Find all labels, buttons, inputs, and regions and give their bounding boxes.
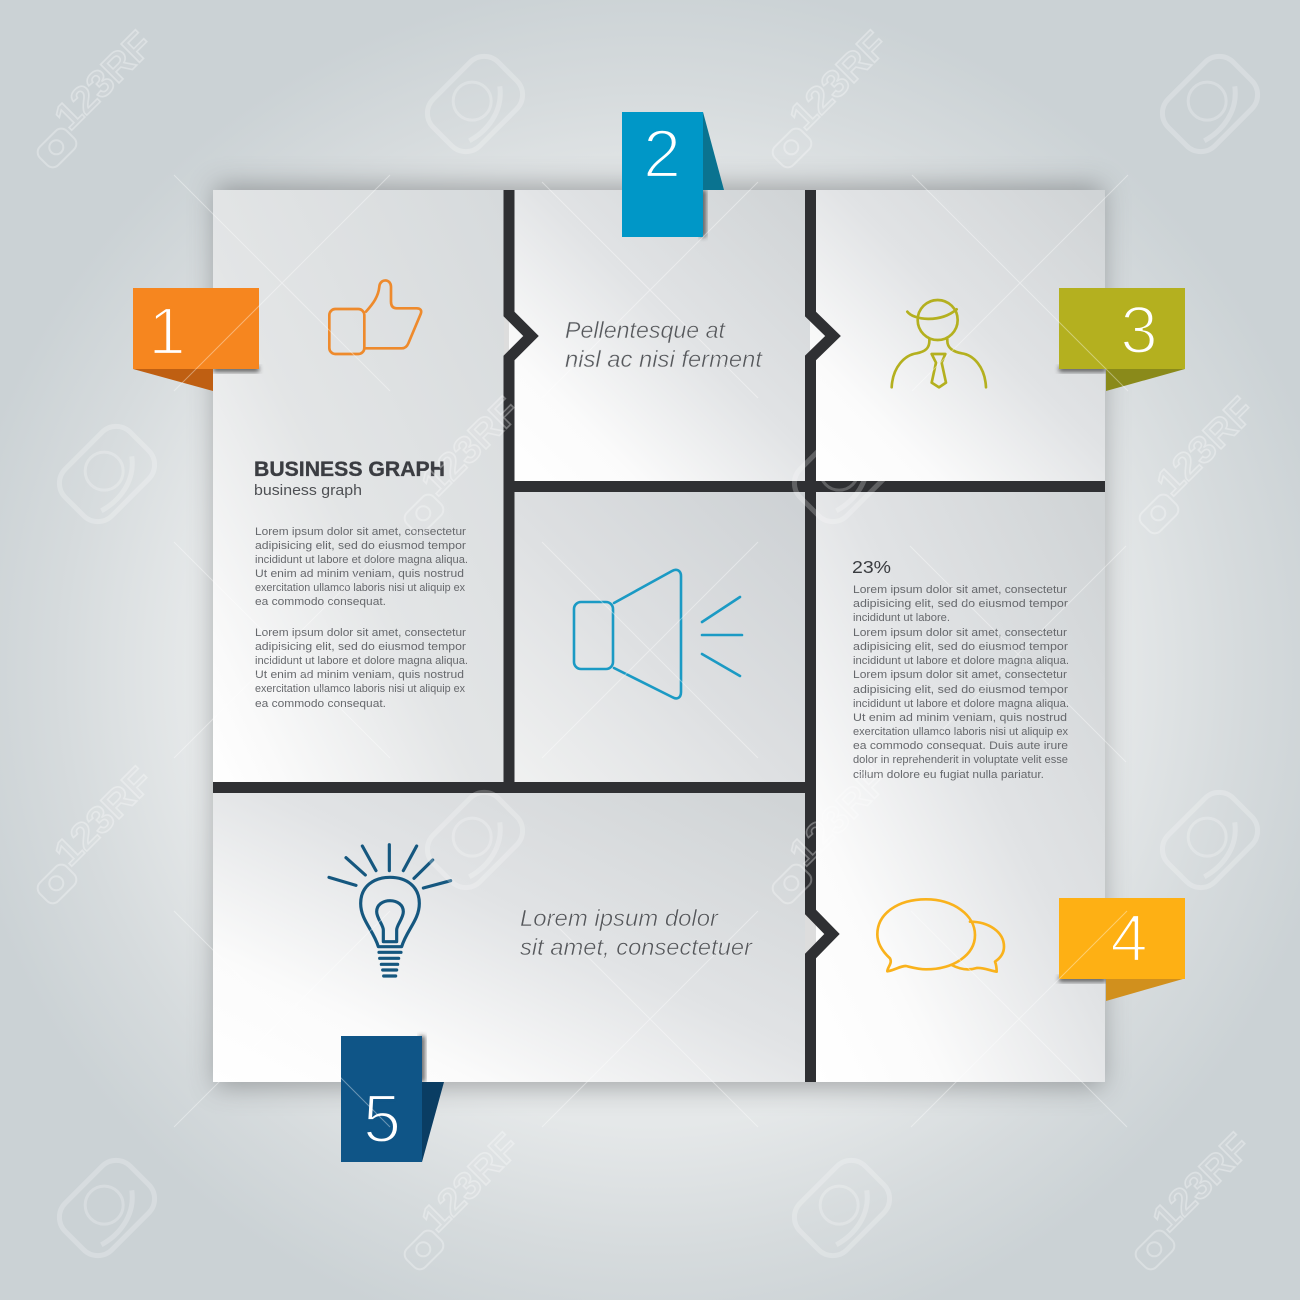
text block: left paragraphs: exercitation ullamco laboris nisi ut aliquip ex xyxy=(255,683,466,695)
ribbon 1 xyxy=(133,288,259,391)
ribbon 4 body xyxy=(1059,898,1185,979)
ribbon 4 shadow xyxy=(1059,976,1106,982)
text block: left paragraphs: Ut enim ad minim veniam, quis nostrud xyxy=(255,669,464,681)
text block: right column xyxy=(852,557,1069,781)
ribbon 1 fold xyxy=(133,369,213,391)
watermark logos: 123RF xyxy=(782,760,896,874)
ribbon 3 body xyxy=(1059,288,1185,369)
ribbon 4 fold xyxy=(1106,979,1183,1001)
right column paragraph: dolor in reprehenderit in voluptate velit esse xyxy=(853,754,1068,766)
ribbon 3 fold xyxy=(1106,369,1185,391)
ribbon 1 number: 1 xyxy=(148,294,186,369)
right column paragraph: Lorem ipsum dolor sit amet, consectetur xyxy=(853,669,1067,681)
ribbon 5 shadow xyxy=(419,1036,425,1082)
right column paragraph: incididunt ut labore. xyxy=(853,612,950,624)
right column paragraph xyxy=(853,584,1069,781)
watermark logos: 123RF xyxy=(414,390,528,504)
watermark logos: 123RF xyxy=(1145,1126,1259,1240)
ribbon 3 shadow xyxy=(1059,366,1106,372)
panel: top right cell xyxy=(810,190,1105,486)
text block: left paragraphs: Lorem ipsum dolor sit amet, consectetur xyxy=(255,627,466,639)
ribbon 5 number: 5 xyxy=(363,1081,401,1157)
ribbon 2 body xyxy=(622,112,703,237)
watermark logos: 123RF xyxy=(47,24,161,138)
right column paragraph: ea commodo consequat. Duis aute irure xyxy=(853,740,1068,752)
panel: right tall cell xyxy=(816,492,1105,1082)
right column paragraph: cillum dolore eu fugiat nulla pariatur. xyxy=(853,769,1044,781)
text block: pellentesque: Pellentesque at xyxy=(565,317,726,343)
panel: center cell xyxy=(514,492,805,782)
right column paragraph: incididunt ut labore et dolore magna aliqua. xyxy=(853,698,1069,710)
ribbon 3 xyxy=(1059,288,1185,391)
ribbon 1 shadow xyxy=(213,366,259,372)
text block: lorem ipsum italic: Lorem ipsum dolor xyxy=(520,905,719,931)
heading subtitle: business graph xyxy=(254,482,362,499)
panel: left cell xyxy=(213,190,504,783)
text block: pellentesque xyxy=(565,317,763,372)
text block: left paragraphs xyxy=(255,526,468,710)
ribbon 4 xyxy=(1059,898,1185,1001)
right column paragraph: Lorem ipsum dolor sit amet, consectetur xyxy=(853,627,1067,639)
icon: speaker xyxy=(574,570,742,698)
panel shadow xyxy=(226,196,1092,1076)
ribbon 2 shadow xyxy=(700,190,706,237)
right column paragraph: adipisicing elit, sed do eiusmod tempor xyxy=(853,598,1068,610)
text block: lorem ipsum italic: sit amet, consectetuer xyxy=(520,934,753,960)
text block: left paragraphs: adipisicing elit, sed do eiusmod tempor xyxy=(255,641,466,653)
text block: left paragraphs: exercitation ullamco laboris nisi ut aliquip ex xyxy=(255,582,466,594)
ribbon 2 number: 2 xyxy=(643,116,681,192)
ribbon 2 xyxy=(622,112,724,237)
text block: left paragraphs: incididunt ut labore et dolore magna aliqua. xyxy=(255,655,468,667)
percentage value: 23% xyxy=(852,557,891,577)
text block: left paragraphs: Ut enim ad minim veniam, quis nostrud xyxy=(255,568,464,580)
icon: thumbs up xyxy=(329,280,421,354)
text block: left paragraphs: Lorem ipsum dolor sit amet, consectetur xyxy=(255,526,466,538)
icon: chat bubbles xyxy=(877,899,1004,972)
text block: left paragraphs: ea commodo consequat. xyxy=(255,698,386,710)
text block: lorem ipsum italic xyxy=(520,905,753,960)
right column paragraph: incididunt ut labore et dolore magna aliqua. xyxy=(853,655,1069,667)
right column paragraph: adipisicing elit, sed do eiusmod tempor xyxy=(853,684,1068,696)
panel: bottom wide cell xyxy=(213,793,805,1082)
right column paragraph: Lorem ipsum dolor sit amet, consectetur xyxy=(853,584,1067,596)
text block: left paragraphs: ea commodo consequat. xyxy=(255,596,386,608)
icon: person with tie xyxy=(892,300,986,387)
ribbon 5 body xyxy=(341,1036,422,1162)
watermark logos: 123RF xyxy=(1149,390,1263,504)
watermark logos: 123RF xyxy=(47,760,161,874)
ribbon 3 number: 3 xyxy=(1120,293,1158,368)
ribbon 4 number: 4 xyxy=(1110,901,1148,976)
ribbon 5 fold xyxy=(422,1082,444,1162)
watermark logos: 123RF xyxy=(782,24,896,138)
right column paragraph: Ut enim ad minim veniam, quis nostrud xyxy=(853,712,1067,724)
right column paragraph: adipisicing elit, sed do eiusmod tempor xyxy=(853,641,1068,653)
watermark crossing lines xyxy=(174,175,1128,1127)
ribbon 5 xyxy=(341,1036,444,1162)
ribbon 2 fold xyxy=(703,112,724,190)
icon: light bulb xyxy=(329,845,451,976)
ribbon 1 body xyxy=(133,288,259,369)
text block: pellentesque: nisl ac nisi ferment xyxy=(565,346,763,372)
heading: business graph xyxy=(254,457,445,499)
heading title: BUSINESS GRAPH xyxy=(254,457,445,481)
panel: top middle cell xyxy=(509,190,810,486)
watermark small logo marks xyxy=(34,125,1182,1273)
dividers xyxy=(213,190,1105,1082)
text block: left paragraphs: adipisicing elit, sed do eiusmod tempor xyxy=(255,540,466,552)
text block: left paragraphs: incididunt ut labore et dolore magna aliqua. xyxy=(255,554,468,566)
watermark logos: 123RF xyxy=(414,1126,528,1240)
right column paragraph: exercitation ullamco laboris nisi ut aliquip ex xyxy=(853,726,1069,738)
